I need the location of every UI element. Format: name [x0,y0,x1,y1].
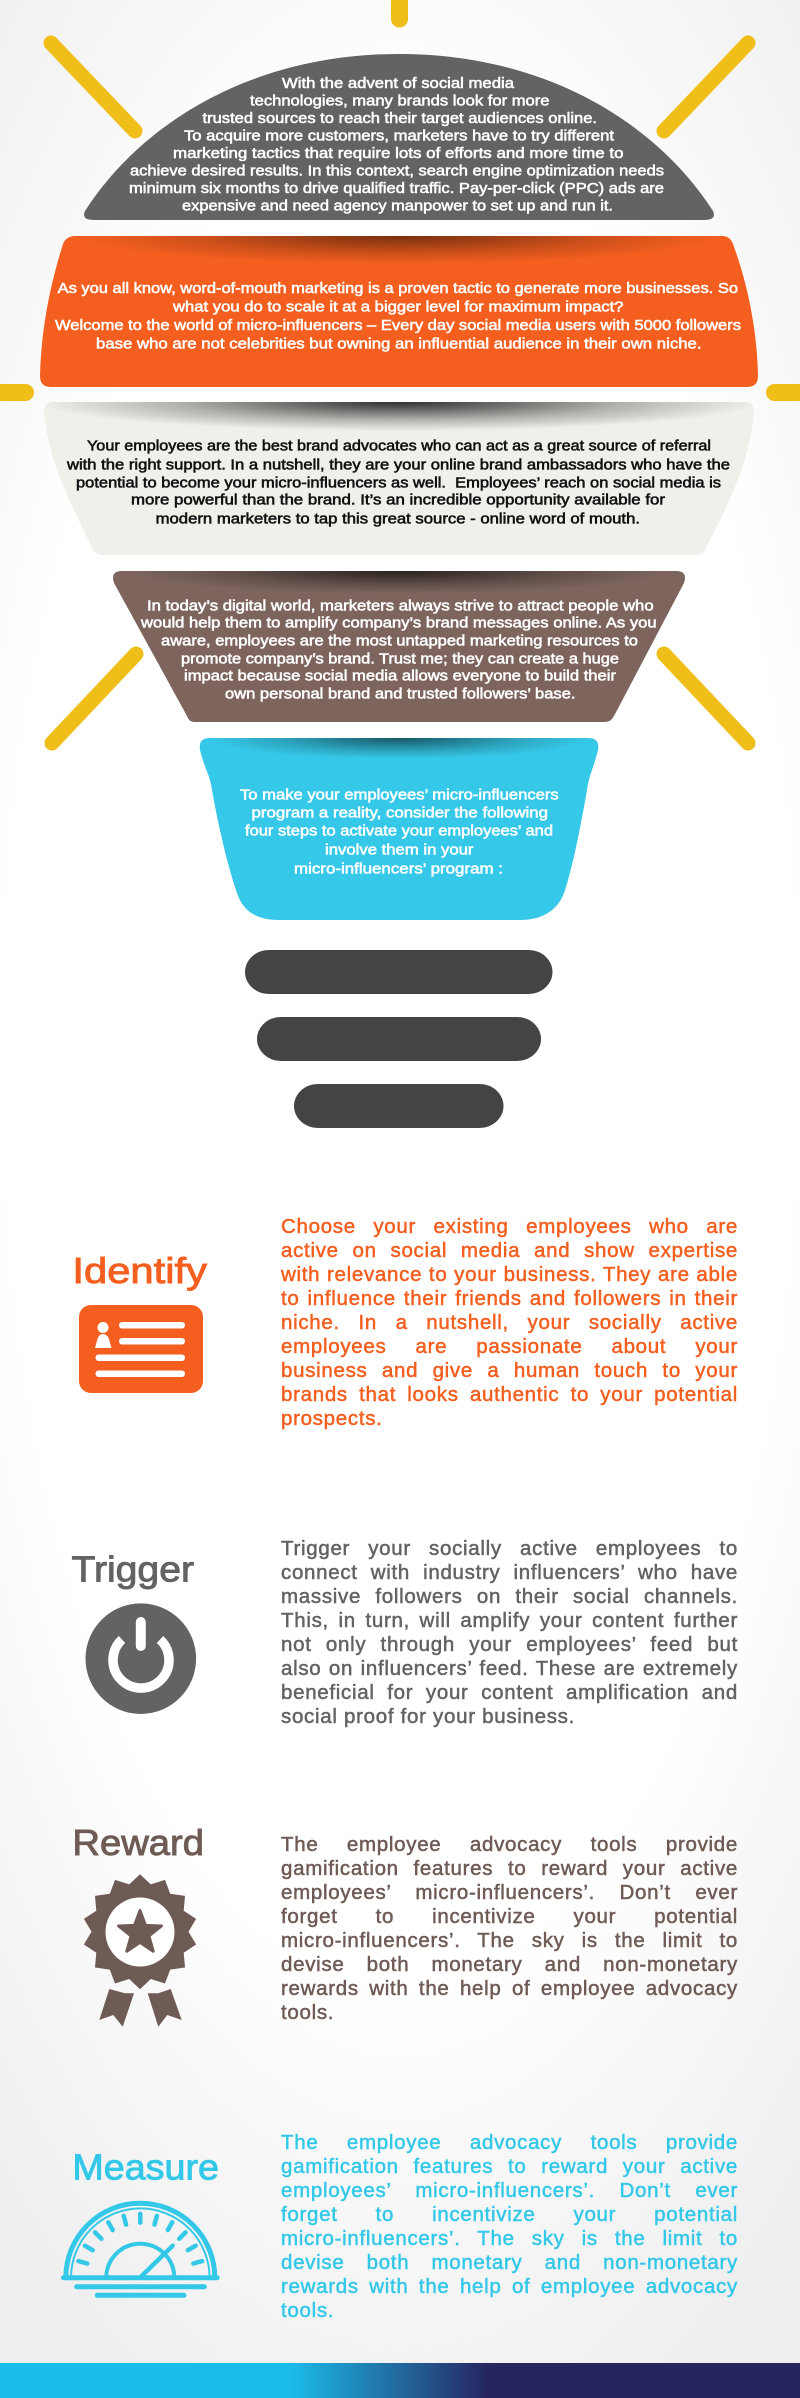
text: Reward description: devise both monetary and non-monetary [281,1953,738,1976]
text: dome paragraph: With the advent of social media [282,76,515,92]
text: Identify description: Choose your existing employees who are [281,1215,738,1238]
text: Identify description: active on social media and show expertise [281,1239,738,1262]
text: Reward description [281,1833,738,2024]
text: Reward description: forget to incentivize your potential [281,1905,738,1928]
text: Measure description [281,2131,738,2322]
text: Trigger description: also on influencers’ feed. These are extremely [281,1657,738,1680]
text: brown paragraph: aware, employees are the most untapped marketing resources to [161,633,638,649]
text: Measure description: The employee advocacy tools provide [281,2131,738,2154]
text: pale paragraph: modern marketers to tap this great source - online word of mouth. [156,511,640,527]
icon: power button [86,1603,196,1714]
text: blue paragraph: four steps to activate your employees’ and [245,823,553,839]
text: pale paragraph: Your employees are the best brand advocates who can act as a great source of referral [87,438,711,454]
text: dome paragraph [129,76,664,214]
text: Identify description: with relevance to your business. They are able [281,1263,738,1286]
text: dome paragraph: minimum six months to drive qualified traffic. Pay-per-click (PPC) ads are [129,181,664,197]
panel: orange bulb section [40,236,758,387]
text: blue paragraph: program a reality, consider the following [252,805,548,821]
panel: bulb dome [84,54,714,220]
text: Reward description: gamification features to reward your active [281,1857,738,1880]
text: pale paragraph: with the right support. In a nutshell, they are your online brand ambassadors who have the [66,457,730,473]
text: Measure description: gamification features to reward your active [281,2155,738,2178]
text: blue paragraph: To make your employees’ micro-influencers [240,787,559,803]
text: Measure description: rewards with the help of employee advocacy [281,2275,738,2298]
text: Measure description: devise both monetary and non-monetary [281,2251,738,2274]
text: Identify description: niche. In a nutshell, your socially active [281,1311,738,1334]
heading: Reward: Reward [72,1822,204,1863]
text: brown paragraph: would help them to amplify company’s brand messages online. As you [140,615,657,631]
icon: award ribbon badge [84,1874,196,2027]
text: blue paragraph: involve them in your [325,842,474,858]
text: dome paragraph: trusted sources to reach their target audiences online. [202,111,597,127]
panel: brown bulb section [113,571,685,722]
text: Measure description: forget to incentivize your potential [281,2203,738,2226]
text: Trigger description: Trigger your socially active employees to [281,1537,738,1560]
text: Reward description: rewards with the help of employee advocacy [281,1977,738,2000]
text: pale paragraph: more powerful than the brand. It’s an incredible opportunity available for [131,493,665,509]
text: brown paragraph: promote company’s brand. Trust me; they can create a huge [181,651,619,667]
text: orange paragraph: Welcome to the world of micro-influencers – Every day social media users with 5000 followers [55,318,741,334]
text: orange paragraph: what you do to scale it at a bigger level for maximum impact? [172,300,624,316]
text: Trigger description: connect with industry influencers’ who have [281,1561,738,1584]
text: Trigger description: This, in turn, will amplify your content further [281,1609,738,1632]
text: Measure description: employees’ micro-influencers’. Don’t ever [281,2179,738,2202]
text: blue paragraph [240,787,559,877]
text: dome paragraph: expensive and need agency manpower to set up and run it. [182,198,613,214]
text: orange paragraph [55,281,741,352]
heading: Trigger: Trigger [72,1548,194,1589]
text: pale paragraph: potential to become your micro-influencers as well. Employees’ reach on social media is [76,475,721,491]
text: Trigger description: not only through your employees’ feed but [281,1633,738,1656]
text: dome paragraph: To acquire more customers, marketers have to try different [184,128,614,144]
icon: speedometer gauge [64,2203,217,2295]
light rays [0,0,800,743]
panel: blue bulb section [200,738,598,920]
text: pale paragraph [66,438,730,527]
heading: Measure: Measure [72,2146,219,2187]
text: Reward description: micro-influencers’. The sky is the limit to [281,1929,738,1952]
text: Measure description: tools. [281,2299,334,2322]
text: orange paragraph: base who are not celebrities but owning an influential audience in their own niche. [96,336,702,352]
text: Identify description: prospects. [281,1407,383,1430]
text: Trigger description: massive followers on their social channels. [281,1585,738,1608]
text: brown paragraph: own personal brand and trusted followers’ base. [225,686,576,702]
text: Trigger description: beneficial for your content amplification and [281,1681,738,1704]
text: orange paragraph: As you all know, word-of-mouth marketing is a proven tactic to generate more businesses. So [58,281,738,297]
text: Reward description: The employee advocacy tools provide [281,1833,738,1856]
heading: Identify: Identify [72,1250,208,1291]
text: brown paragraph: In today’s digital world, marketers always strive to attract people who [147,598,654,614]
text: Identify description: brands that looks authentic to your potential [281,1383,738,1406]
text: Identify description: employees are passionate about your [281,1335,738,1358]
text: Measure description: micro-influencers’. The sky is the limit to [281,2227,738,2250]
text: dome paragraph: achieve desired results. In this context, search engine optimization needs [130,164,664,180]
icon: ID card [79,1305,203,1393]
bulb base bars [245,950,552,1128]
text: Identify description: to influence their friends and followers in their [281,1287,738,1310]
text: Reward description: tools. [281,2001,334,2024]
text: Identify description [280,1215,738,1430]
text: brown paragraph [140,598,657,702]
text: Identify description: business and give a human touch to your [281,1359,738,1382]
text: Reward description: employees’ micro-influencers’. Don’t ever [281,1881,738,1904]
panel: pale bulb section [44,402,754,555]
text: blue paragraph: micro-influencers’ program : [294,861,503,877]
footer bar [0,2363,800,2398]
text: dome paragraph: technologies, many brands look for more [250,94,550,110]
text: Trigger description [281,1537,738,1728]
text: Trigger description: social proof for your business. [281,1705,575,1728]
text: brown paragraph: impact because social media allows everyone to build their [184,668,616,684]
text: dome paragraph: marketing tactics that require lots of efforts and more time to [173,146,624,162]
